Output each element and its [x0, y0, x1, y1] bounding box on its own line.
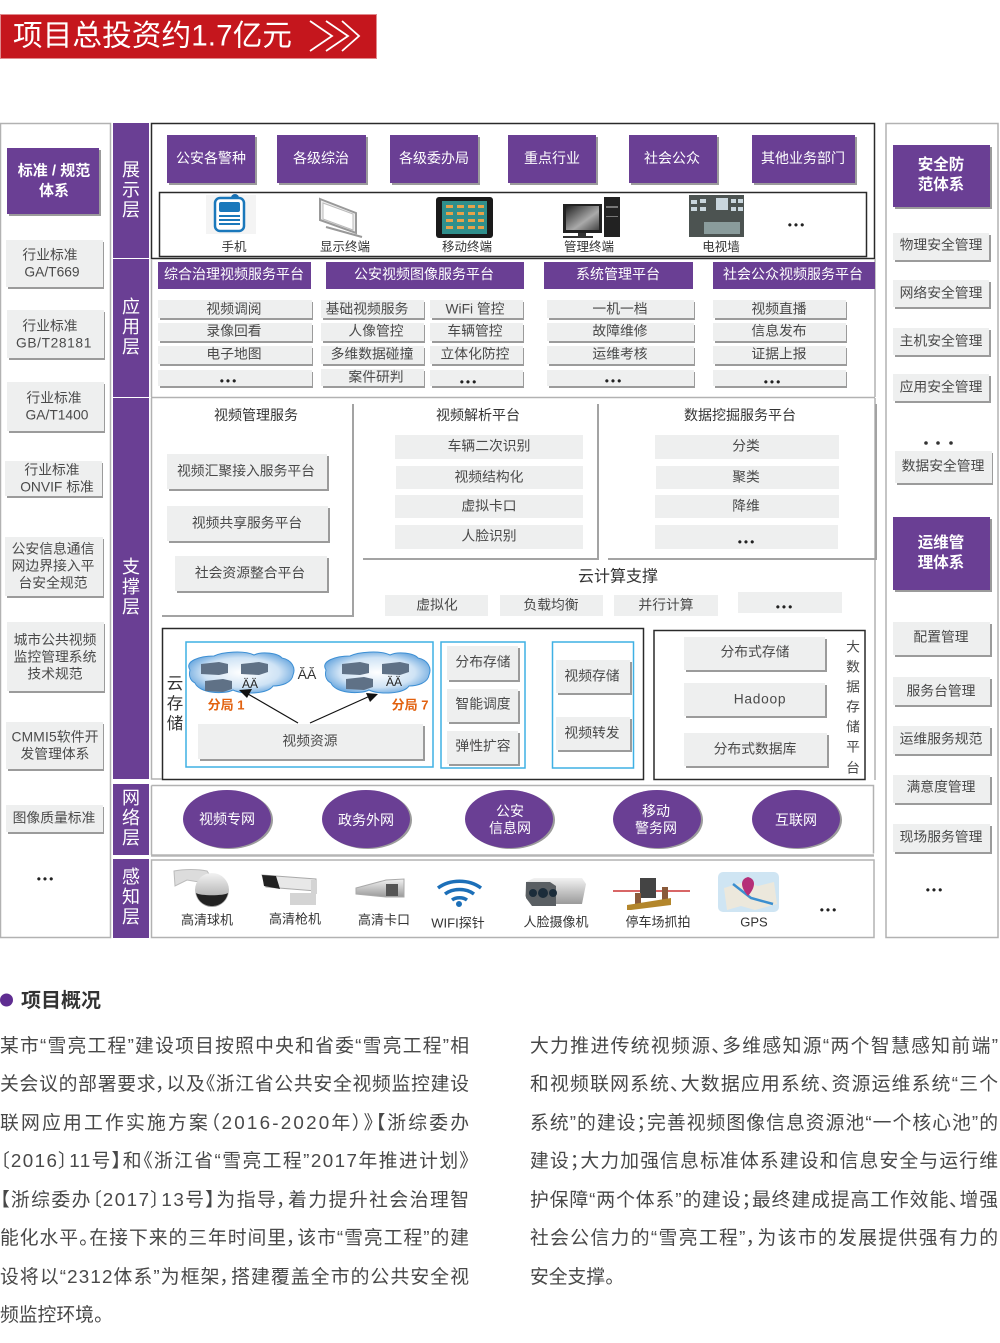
more dots: •••: [37, 872, 55, 886]
box: GA/T1400: 行业标准: [26, 390, 82, 406]
box: scheduling: 智能调度: [455, 696, 511, 712]
box: public security boundary: 台安全规范: [19, 574, 88, 590]
column: system management services: 运维考核: [592, 346, 648, 362]
panel: security and operations systems: [886, 124, 998, 938]
text block: right column: [530, 1035, 998, 1287]
label: big data storage platform: 平: [846, 740, 860, 754]
box: video forwarding: 视频转发: [564, 726, 620, 740]
layer label: perception: [113, 859, 149, 938]
box: dimensionality reduction: 降维: [732, 498, 760, 514]
platform heading: public video: [713, 262, 875, 289]
label: big data storage platform: 储: [846, 720, 860, 734]
box: load balancing: 负载均衡: [523, 598, 579, 612]
box: GA/T669: GA/T669: [24, 264, 80, 280]
box: video source: 视频资源: [282, 734, 338, 748]
column: public security services A: 多维数据碰撞: [331, 346, 414, 362]
box: application security: [893, 374, 991, 403]
label: big data storage platform: 台: [846, 760, 860, 776]
label: cloud storage: [167, 675, 183, 733]
icon: checkpoint camera: [356, 879, 404, 897]
network: public security info: 信息网: [489, 820, 531, 836]
panel: cloud computing support: [385, 566, 842, 616]
label: branch 7: 分局 7: [392, 698, 428, 712]
box: ONVIF: 行业标准: [24, 462, 80, 478]
icon: parking capture: [613, 878, 690, 910]
box: CMMI5: CMMI5软件开: [12, 730, 99, 744]
more dots: •••: [820, 903, 838, 917]
box: service spec: 运维服务规范: [900, 730, 983, 746]
box: distributed database: [684, 733, 829, 768]
box: more: [738, 592, 842, 614]
user: other departments: [752, 135, 857, 185]
box: more: [655, 525, 838, 549]
label: branch 1: 分局 1: [208, 698, 244, 712]
column: system management services: 故障维修: [592, 324, 648, 338]
platform heading: system management: 系统管理平台: [576, 266, 660, 282]
box: distributed database: 分布式数据库: [714, 742, 797, 756]
box: configuration: 配置管理: [913, 630, 969, 644]
label: wifi probe: WIFI探针: [431, 916, 485, 930]
heading: project overview: 项目概况: [21, 989, 101, 1012]
layer label: application: 应: [122, 297, 140, 317]
layer label: perception: 感: [122, 867, 140, 887]
box: vehicle recognition: [395, 435, 583, 459]
frame: video storage: [552, 642, 634, 768]
user: other departments: 其他业务部门: [761, 150, 845, 166]
box: video storage: 视频存储: [564, 668, 620, 684]
layer label: perception: 层: [122, 907, 140, 927]
title banner: [0, 14, 376, 58]
box: public security boundary: [5, 537, 104, 598]
box: dimensionality reduction: [655, 495, 839, 518]
box: virtual checkpoint: 虚拟卡口: [461, 498, 517, 514]
box: city video spec: 城市公共视频: [14, 632, 97, 648]
user: public: 社会公众: [644, 150, 700, 166]
label: big data storage platform: 数: [846, 660, 860, 674]
box: image quality: [6, 805, 104, 834]
box: Hadoop: Hadoop: [734, 692, 786, 706]
panel: cloud storage: [162, 628, 644, 780]
box: load balancing: [500, 595, 603, 616]
layer label: network: 层: [122, 828, 140, 848]
panel: standards system: [0, 124, 110, 938]
text block: left column: 【浙综委办〔2017〕13号】为指导，着力提升社会治理智: [0, 1189, 469, 1210]
user: offices: 各级委办局: [399, 150, 469, 166]
layer label: application: [113, 259, 149, 397]
box: access platform: [167, 454, 329, 491]
more dots: •••: [926, 883, 944, 897]
layer label: display: [113, 123, 149, 258]
platform heading: system management: [544, 262, 693, 289]
box: onsite service: [893, 824, 992, 854]
panel: video analysis platform: [363, 404, 598, 559]
text block: left column: 〔2016〕11号】和《浙江省“雪亮工程”2017年推进计划》: [0, 1150, 469, 1171]
icon: cloud 1: ÄÄ: [242, 677, 258, 691]
layer label: support: [113, 398, 149, 779]
column: public video services: 视频直播: [751, 300, 807, 316]
box: elastic scaling: 弹性扩容: [455, 738, 511, 754]
box: clustering: [656, 466, 839, 489]
network: public security info: 公安: [496, 803, 524, 819]
text block: right column: 和视频联网系统、大数据应用系统、资源运维系统“三个: [530, 1073, 998, 1094]
user: key industries: [508, 135, 598, 185]
heading: operations: [893, 517, 992, 592]
column: public security services A: 基础视频服务: [326, 300, 409, 316]
label: video wall: 电视墙: [702, 239, 740, 254]
icon: video wall: [689, 195, 744, 237]
box: virtualization: [385, 595, 488, 616]
label: cloud storage: 存: [167, 694, 183, 713]
label: display terminal: 显示终端: [320, 239, 370, 254]
panel: big data storage platform: [654, 630, 865, 780]
icon: cloud 7: [325, 652, 430, 693]
label: GPS: GPS: [740, 914, 768, 930]
layer label: support: 撑: [122, 577, 140, 597]
text block: left column: 设将以“2312体系”为框架，搭建覆盖全市的公共安全视: [0, 1266, 469, 1287]
column: public security services B: •••: [460, 375, 478, 389]
box: face recognition: 人脸识别: [461, 528, 517, 544]
text block: right column: 社会公信力的“雪亮工程”，为该市的发展提供强有力的: [530, 1227, 998, 1248]
user: comprehensive: [277, 135, 368, 185]
panel: video analysis platform: 视频解析平台: [436, 407, 520, 423]
column: public security services A: 案件研判: [348, 368, 404, 384]
box: GA/T1400: GA/T1400: [26, 408, 89, 422]
box: face recognition: [395, 525, 583, 549]
box: physical security: 物理安全管理: [900, 236, 983, 252]
box: video source: [198, 724, 425, 761]
terminals frame: [160, 192, 866, 256]
network: video private: 视频专网: [199, 811, 255, 827]
layer label: display: 层: [122, 200, 140, 220]
text block: left column: 联网应用工作实施方案（2016-2020年）》【浙综委办: [0, 1112, 469, 1133]
text block: left column: 某市“雪亮工程”建设项目按照中央和省委“雪亮工程”相: [0, 1035, 469, 1056]
column: public video services: •••: [764, 375, 782, 389]
platform heading: public video: 社会公众视频服务平台: [723, 266, 863, 282]
icon: display: [320, 199, 362, 237]
platform heading: public security: 公安视频图像服务平台: [354, 266, 494, 282]
icon: tablet: [436, 197, 493, 238]
box: GA/T1400: [7, 382, 105, 433]
box: distributed storage: 分布式存储: [721, 644, 790, 660]
layer label: network: [113, 784, 149, 855]
column: governance services: •••: [220, 374, 238, 388]
network: government: [322, 790, 412, 849]
layer label: application: 用: [122, 317, 140, 337]
label: big data storage platform: [846, 640, 860, 776]
network: mobile police: 警务网: [635, 820, 677, 836]
heading: security: 安全防: [918, 154, 964, 174]
box: host security: [893, 328, 991, 357]
network: mobile police: 移动: [642, 803, 670, 819]
box: more: •••: [776, 600, 794, 614]
user: key industries: 重点行业: [524, 150, 580, 166]
label: phone: 手机: [221, 240, 247, 254]
column: public security services B: 立体化防控: [441, 346, 510, 362]
network: internet: 互联网: [775, 812, 817, 828]
panel: perception layer: [152, 860, 874, 938]
box: classification: [655, 435, 839, 459]
user: public: [629, 135, 719, 185]
box: ONVIF: [5, 461, 103, 498]
box: physical security: [893, 233, 991, 262]
box: GA/T669: [6, 240, 104, 289]
label: big data storage platform: 存: [846, 700, 860, 714]
box: public security boundary: 公安信息通信: [12, 540, 95, 556]
icon: face camera: [525, 878, 586, 906]
label: mobile terminal: 移动终端: [442, 239, 492, 254]
box: network security: 网络安全管理: [900, 284, 983, 300]
icon: GPS map: [718, 872, 779, 912]
network: public security info: [465, 790, 555, 849]
box: sharing platform: [167, 506, 330, 543]
box: GA/T669: 行业标准: [22, 248, 78, 262]
column: governance services: 电子地图: [206, 346, 262, 362]
box: application security: 应用安全管理: [900, 378, 983, 394]
panel: display layer: [152, 124, 874, 258]
box: GB/T28181: GB/T28181: [16, 336, 92, 350]
layer label: support: 支: [122, 557, 140, 577]
frame: branch clouds: [186, 642, 433, 767]
column: governance services: 录像回看: [206, 324, 262, 338]
arrow: to branch 7: [310, 693, 378, 723]
column: public security services B: 车辆管控: [447, 322, 503, 338]
box: more: •••: [738, 535, 756, 549]
box: configuration: [893, 622, 992, 657]
heading: standards: 体系: [39, 182, 69, 200]
icon: cloud 7: ÄÄ: [386, 675, 402, 689]
user: offices: [390, 135, 480, 185]
text block: left column: 频监控环境。: [0, 1304, 103, 1325]
box: GB/T28181: [7, 310, 105, 360]
user: police: [167, 135, 257, 185]
network: internet: [752, 790, 842, 849]
layer label: network: 网: [122, 788, 140, 808]
panel: video management service: 视频管理服务: [214, 407, 298, 423]
column: public security services A: [321, 300, 425, 388]
text block: right column: 系统”的建设；完善视频图像信息资源池“一个核心池”的: [530, 1112, 998, 1133]
box: CMMI5: [6, 722, 104, 771]
box: city video spec: 监控管理系统: [14, 650, 97, 664]
label: management terminal: 管理终端: [564, 239, 614, 254]
heading: operations: 运维管: [918, 532, 964, 552]
heading: standards: 标准 / 规范: [18, 162, 90, 180]
box: data security: 数据安全管理: [902, 458, 985, 474]
label: parking capture: 停车场抓拍: [625, 914, 691, 930]
box: resources platform: [175, 556, 329, 593]
text block: left column: 关会议的部署要求，以及《浙江省公共安全视频监控建设: [0, 1073, 469, 1094]
layer label: perception: 知: [122, 887, 140, 907]
label: gun camera: 高清枪机: [269, 912, 321, 926]
column: public security services A: 人像管控: [348, 324, 404, 338]
icon: wifi: [438, 881, 481, 906]
icon: cloud 1: [189, 652, 294, 693]
column: public video services: 信息发布: [751, 322, 807, 338]
column: system management services: •••: [605, 374, 623, 388]
icon: dome camera: [174, 870, 229, 907]
heading: security: 范体系: [918, 176, 964, 194]
network: government: 政务外网: [338, 812, 394, 828]
label: link: ĂĂ: [298, 666, 317, 682]
column: public video services: 证据上报: [751, 346, 807, 362]
network: video private: [183, 790, 273, 849]
frame: storage functions: [441, 642, 525, 768]
box: Hadoop: [684, 683, 827, 718]
text block: right column: 大力推进传统视频源、多维感知源“两个智慧感知前端”: [530, 1035, 998, 1056]
panel: data mining platform: [608, 404, 876, 559]
label: cloud storage: 云: [167, 675, 183, 693]
panel: application layer: [151, 259, 875, 398]
box: CMMI5: 发管理体系: [21, 746, 89, 762]
box: image quality: 图像质量标准: [13, 810, 96, 826]
more dots: •••: [788, 218, 806, 232]
box: distributed storage: [684, 637, 827, 672]
box: service spec: [893, 726, 992, 756]
panel: support layer: [152, 398, 876, 780]
box: classification: 分类: [732, 438, 760, 454]
title banner: 项目总投资约1.7亿元: [13, 20, 292, 52]
text block: right column: 安全支撑。: [530, 1266, 615, 1287]
panel: video management service: [162, 404, 353, 616]
box: resources platform: 社会资源整合平台: [195, 566, 305, 580]
icon: PC: [563, 197, 620, 238]
column: governance services: [158, 300, 313, 388]
box: data security: [895, 451, 993, 485]
box: virtualization: 虚拟化: [416, 598, 458, 612]
box: host security: 主机安全管理: [900, 332, 983, 348]
box: distributed storage: 分布存储: [455, 654, 511, 670]
box: ONVIF: ONVIF 标准: [20, 480, 94, 494]
box: public security boundary: 网边界接入平: [12, 558, 95, 574]
text block: left column: [0, 1035, 469, 1325]
label: face camera: 人脸摄像机: [523, 914, 589, 930]
user: comprehensive: 各级综治: [293, 150, 349, 166]
box: onsite service: 现场服务管理: [900, 830, 983, 844]
box: network security: [893, 280, 991, 309]
box: structuring: 视频结构化: [455, 470, 524, 484]
layer label: network: 络: [122, 808, 140, 828]
layer label: display: 示: [122, 180, 140, 200]
panel: data mining platform: 数据挖掘服务平台: [684, 407, 796, 423]
box: vehicle recognition: 车辆二次识别: [448, 438, 530, 454]
text block: right column: 建设；大力加强信息标准体系建设和信息安全与运行维: [530, 1150, 998, 1171]
more dots: [924, 441, 953, 445]
box: virtual checkpoint: [395, 495, 583, 518]
user: police: 公安各警种: [176, 150, 246, 166]
column: public security services B: WiFi 管控: [445, 302, 505, 316]
box: parallel computing: 并行计算: [638, 598, 694, 612]
box: structuring: [396, 466, 583, 489]
layer label: support: 层: [122, 597, 140, 617]
box: city video spec: 技术规范: [27, 666, 83, 682]
box: satisfaction: 满意度管理: [907, 778, 976, 794]
platform heading: public security: [326, 262, 524, 289]
platform heading: governance: [158, 262, 311, 289]
box: clustering: 聚类: [732, 470, 760, 484]
box: service desk: [893, 677, 992, 707]
icon: gun camera: [262, 875, 317, 905]
label: cloud storage: 储: [167, 714, 183, 733]
box: access platform: 视频汇聚接入服务平台: [177, 462, 315, 478]
column: governance services: 视频调阅: [206, 302, 262, 316]
heading: security: [893, 145, 992, 209]
heading: operations: 理体系: [918, 554, 964, 572]
panel: cloud computing support: 云计算支撑: [578, 566, 658, 586]
box: sharing platform: 视频共享服务平台: [192, 514, 302, 530]
column: public video services: [713, 300, 847, 389]
arrow: to branch 1: [239, 689, 298, 723]
box: satisfaction: [893, 775, 992, 805]
box: service desk: 服务台管理: [907, 684, 976, 698]
column: system management services: 一机一档: [592, 302, 648, 316]
label: dome camera: 高清球机: [181, 912, 233, 928]
icon: phone: [206, 194, 256, 234]
layer label: display: 展: [122, 160, 140, 180]
layer label: application: 层: [122, 337, 140, 357]
box: parallel computing: [614, 595, 718, 616]
platform heading: governance: 综合治理视频服务平台: [164, 266, 304, 282]
column: public security services B: [430, 300, 524, 389]
network: mobile police: [613, 790, 703, 849]
column: system management services: [547, 300, 695, 388]
text block: right column: 护保障“两个体系”的建设；最终建成提高工作效能、增强: [530, 1189, 998, 1210]
box: GB/T28181: 行业标准: [22, 318, 78, 334]
label: big data storage platform: 大: [846, 640, 860, 654]
label: checkpoint camera: 高清卡口: [358, 912, 410, 928]
heading: standards: [7, 148, 101, 216]
label: big data storage platform: 据: [846, 680, 860, 694]
panel: network layer: [151, 786, 874, 856]
text block: left column: 能化水平。在接下来的三年时间里，该市“雪亮工程”的建: [0, 1227, 469, 1248]
box: city video spec: [7, 622, 105, 693]
